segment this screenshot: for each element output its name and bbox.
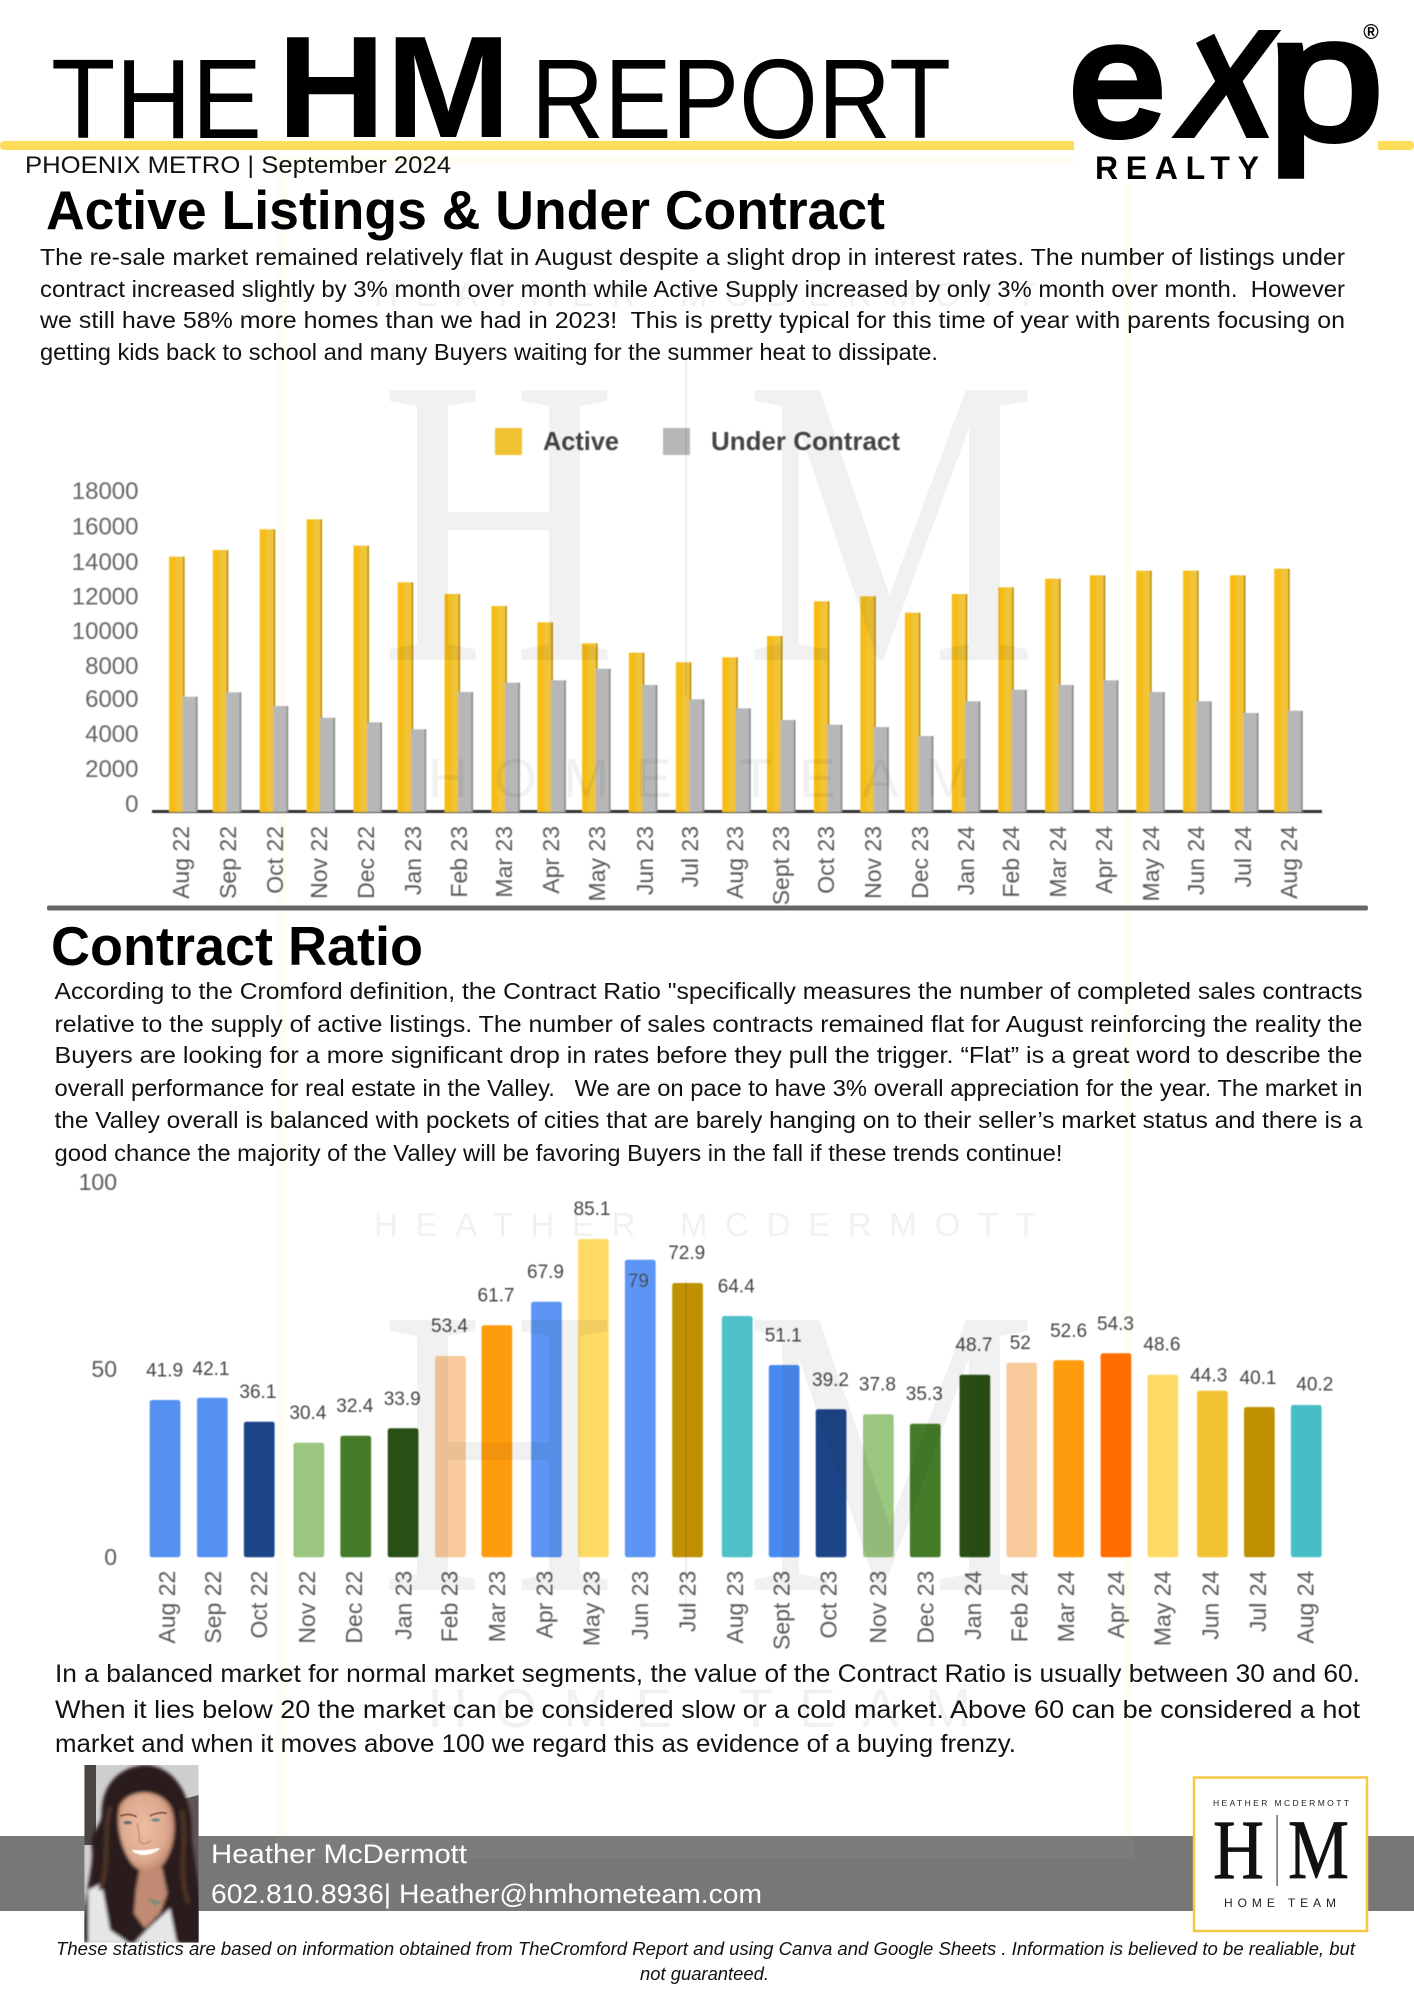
contact text: 602.810.8936| Heather@hmhometeam.com [211,1879,762,1909]
value labels: 37.8 [859,1374,896,1396]
ratio bars [150,1239,1322,1557]
x axis month labels: May 24 [1138,826,1164,901]
footer contact band [0,1836,1414,1911]
chart legend [495,426,900,456]
HM Home Team logo [1194,1778,1367,1931]
text block: contract ratio definition [54,978,1363,1166]
x axis month labels: Jul 24 [1245,1570,1271,1632]
eXp Realty logo: ® [1363,21,1379,44]
value labels: 48.6 [1143,1334,1180,1356]
y axis labels: 16000 [72,514,138,540]
x axis month labels: Mar 24 [1053,1571,1079,1642]
x axis month labels: Feb 24 [998,826,1024,898]
under contract bars [183,669,1303,812]
y axis labels: 0 [125,791,138,818]
x axis month labels: Jul 24 [1230,826,1256,887]
text block: contract ratio definition: According to the Cromford definition, the Contract Ratio "specifically measures the number of completed sales contracts [54,978,1363,1004]
value labels: 64.4 [718,1276,755,1298]
x axis month labels: Apr 24 [1103,1570,1129,1638]
value labels: 40.1 [1240,1368,1276,1389]
text block: market balance explanation: market and when it moves above 100 we regard this as evidence of a buying frenzy. [55,1730,1016,1758]
text block: market balance explanation: When it lies below 20 the market can be considered slow or a cold market. Above 60 can be considered a hot [55,1696,1360,1724]
text block: contract ratio definition: Buyers are looking for a more significant drop in rates before they pull the trigger. “Flat” is a great word to describe the [54,1042,1362,1068]
watermark: HM home team logo, repeated: HEATHER MCDERMOTT [374,1206,1036,1243]
header: report title: REPORT [531,36,951,162]
bar chart: contract ratio by month [79,1169,1333,1650]
x axis month labels: Oct 23 [813,826,839,894]
header: report title: HM [277,6,511,168]
x axis month labels: Feb 23 [436,1571,462,1642]
y axis labels: 14000 [72,549,138,576]
text block: contract ratio definition: the Valley overall is balanced with pockets of cities that are barely hanging on to their seller’s market status and there is a [54,1107,1363,1133]
text block: market summary: we still have 58% more homes than we had in 2023! This is pretty typical for this time of year with parents focusing on [39,307,1345,333]
heading: contract ratio: Contract Ratio [51,915,423,977]
x axis month labels: Oct 22 [262,826,288,894]
x axis month labels: Nov 22 [306,826,332,899]
x axis month labels: Jan 23 [390,1571,416,1640]
x axis month labels: Jan 24 [960,1570,986,1640]
x axis month labels: Nov 22 [294,1571,320,1644]
y axis labels: 6000 [85,686,138,713]
text block: contract ratio definition: good chance the majority of the Valley will be favoring Buyers in the fall if these trends continue! [54,1140,1062,1166]
text block: market summary: contract increased slightly by 3% month over month while Active Supply increased by only 3% month over month. However [40,276,1345,302]
value labels: 72.9 [668,1243,705,1264]
value labels: 52 [1010,1333,1031,1354]
x axis month labels: Jul 23 [677,826,703,887]
photo: agent portrait [83,1765,202,1943]
value labels: 51.1 [765,1326,802,1346]
value labels: 40.2 [1296,1374,1333,1396]
value labels: 36.1 [239,1382,276,1403]
x axis month labels: Dec 23 [912,1571,938,1644]
watermark: HM home team logo, repeated: HOME TEAM [428,1677,971,1739]
value labels: 85.1 [574,1199,610,1220]
x axis month labels: Feb 24 [1006,1570,1032,1642]
eXp Realty logo: X [1165,0,1291,171]
x axis month labels: Aug 23 [722,1571,748,1644]
value labels: 32.4 [336,1396,374,1417]
x axis month labels: Aug 22 [168,826,194,899]
watermark: HM home team logo, repeated: H [380,294,617,750]
x axis month labels: May 23 [584,826,610,901]
x axis month labels: Nov 23 [860,826,886,899]
y axis labels: 2000 [85,756,138,783]
x axis month labels: Sep 22 [200,1571,226,1644]
x axis month labels: Jun 23 [632,826,658,895]
value labels: 42.1 [193,1359,229,1380]
x axis month labels: Oct 22 [246,1571,272,1638]
x axis month labels: Mar 23 [484,1571,510,1642]
value labels: 44.3 [1190,1366,1227,1386]
x axis month labels: May 23 [578,1571,604,1646]
x axis month labels: Dec 23 [907,826,933,899]
x axis month labels: Feb 23 [446,826,472,898]
x axis month labels: Dec 22 [353,826,379,899]
disclaimer [56,1939,1356,1984]
x axis month labels: Jun 24 [1183,826,1209,895]
y axis labels: 10000 [72,618,138,645]
x axis month labels: Sept 23 [768,826,794,905]
x axis month labels: Aug 24 [1292,1571,1318,1644]
value labels: 35.3 [906,1384,943,1405]
header: report title [51,6,951,168]
y axis labels [72,478,138,818]
x axis month labels: Sept 23 [768,1571,794,1650]
text block: market summary: The re-sale market remained relatively flat in August despite a slight drop in interest rates. The number of listings under [40,244,1345,270]
chart legend: Active [543,426,619,456]
x axis month labels: Aug 24 [1276,826,1302,899]
x axis month labels: Jun 23 [627,1571,653,1640]
eXp Realty logo [1070,0,1384,186]
contact text [211,1839,762,1909]
x axis month labels: Nov 23 [865,1571,891,1644]
disclaimer: These statistics are based on information obtained from TheCromford Report and using Canva and Google Sheets . Information is believed to be realiable, but [56,1939,1356,1959]
value labels: 54.3 [1097,1314,1134,1335]
x axis month labels: Aug 23 [722,826,748,899]
bar chart: active listings and under contract [72,426,1322,905]
HM Home Team logo: H [1213,1803,1264,1897]
x axis month labels: Sep 22 [215,826,241,899]
value labels: 79 [628,1271,649,1292]
value labels: 41.9 [146,1360,183,1382]
axis baseline [152,810,1322,813]
heading: active listings: Active Listings & Under Contract [46,179,885,241]
x axis month labels: Dec 22 [341,1571,367,1644]
header: report title: THE [51,36,262,162]
watermark: HM home team logo, repeated: M [745,294,1037,750]
x axis month labels: May 24 [1150,1571,1176,1646]
watermark: HM home team logo, repeated: HOME TEAM [428,747,971,809]
value labels: 53.4 [431,1316,468,1337]
text block: contract ratio definition: relative to the supply of active listings. The number of sales contracts remained flat for August reinforcing the reality the [54,1011,1362,1037]
y axis labels: 50 [91,1356,117,1382]
x axis month labels: Apr 23 [532,1571,558,1638]
y axis labels: 18000 [72,478,138,505]
x axis month labels: Jul 23 [674,1571,700,1632]
x axis month labels [154,1570,1318,1650]
value labels: 33.9 [384,1389,421,1410]
watermark: HM home team logo, repeated: M [745,1224,1037,1680]
y axis labels: 100 [79,1169,117,1195]
x axis month labels: Jan 24 [953,826,979,895]
value labels: 61.7 [478,1286,514,1306]
watermark: HM home team logo, repeated: HEATHER MCDERMOTT [374,276,1036,313]
x axis month labels: Aug 22 [154,1571,180,1644]
text block: market balance explanation [55,1660,1360,1758]
text block: market summary [39,244,1345,365]
eXp Realty logo: REALTY [1095,150,1259,186]
y axis labels: 8000 [85,653,138,680]
x axis month labels: Mar 24 [1045,826,1071,898]
text block: market balance explanation: In a balanced market for normal market segments, the value of the Contract Ratio is usually between 30 and 60. [55,1660,1360,1688]
value labels: 52.6 [1050,1321,1087,1342]
value labels [146,1199,1333,1424]
y axis labels: 4000 [85,721,138,748]
HM Home Team logo: M [1288,1803,1349,1897]
contact text: Heather McDermott [211,1839,468,1869]
yellow header rule [0,141,1414,150]
x axis month labels: Mar 23 [491,826,517,898]
subtitle: location and date: PHOENIX METRO | September 2024 [25,152,451,179]
text block: contract ratio definition: overall performance for real estate in the Valley. We are on pace to have 3% overall appreciation for the year. The market in [54,1075,1362,1101]
disclaimer: not guaranteed. [640,1964,769,1984]
active listing bars [169,519,1290,812]
HM Home Team logo: HEATHER MCDERMOTT [1213,1798,1349,1808]
text block: market summary: getting kids back to school and many Buyers waiting for the summer heat to dissipate. [40,339,938,365]
value labels: 67.9 [527,1262,564,1283]
HM Home Team logo: HOME TEAM [1224,1896,1336,1910]
watermark: HM home team logo, repeated: H [380,1224,617,1680]
x axis month labels [168,826,1302,905]
y axis labels [79,1169,117,1570]
x axis month labels: Oct 23 [816,1571,842,1638]
y axis labels: 12000 [72,584,138,610]
value labels: 30.4 [289,1403,327,1424]
y axis labels: 0 [104,1544,117,1570]
x axis month labels: Jan 23 [400,826,426,895]
x axis month labels: Jun 24 [1198,1570,1224,1640]
value labels: 48.7 [955,1335,992,1356]
x axis month labels: Apr 24 [1091,826,1117,894]
value labels: 39.2 [812,1370,849,1391]
x axis month labels: Apr 23 [538,826,564,894]
watermark: HM home team logo, repeated [374,276,1037,1739]
chart legend: Under Contract [711,426,900,456]
